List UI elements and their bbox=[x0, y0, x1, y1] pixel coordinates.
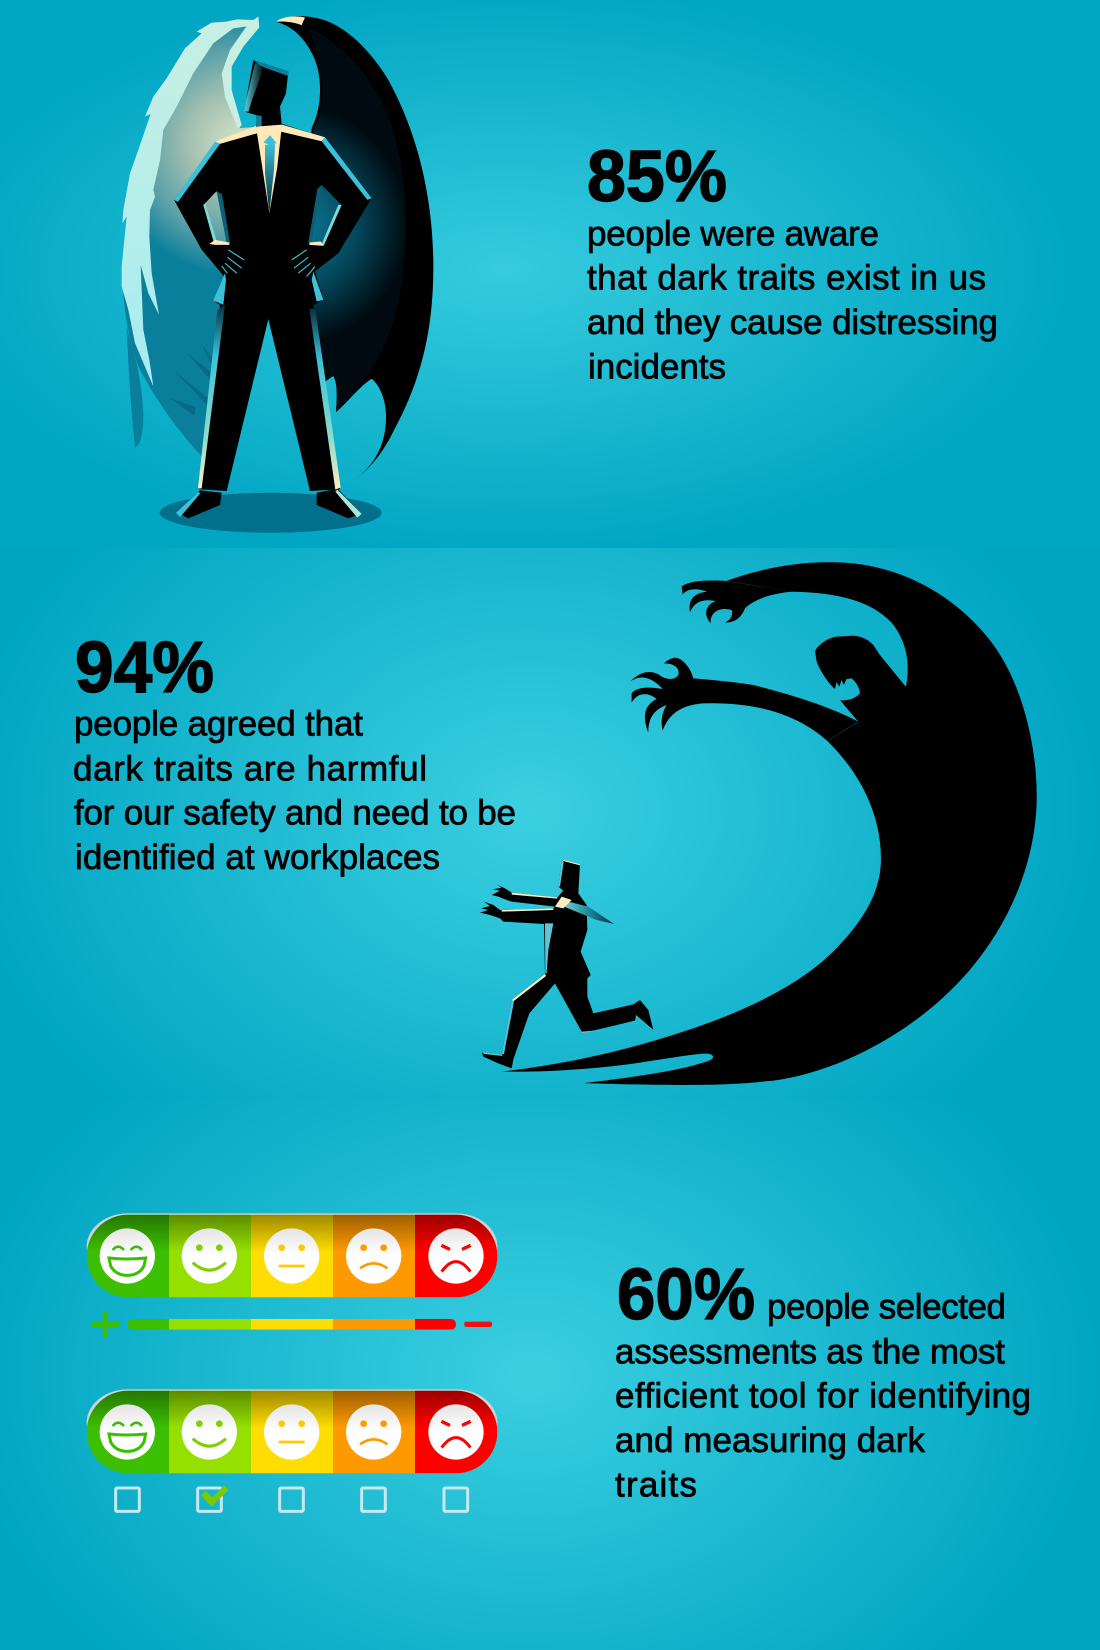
illustration: businessman with angel and devil wings bbox=[122, 16, 433, 533]
stat text: 85% bbox=[587, 137, 998, 386]
background: middle section bbox=[0, 548, 1100, 1100]
description: dark traits are harmful bbox=[73, 750, 427, 788]
checkboxes bbox=[116, 1488, 468, 1511]
description: identified at workplaces bbox=[75, 838, 440, 877]
description bbox=[587, 214, 998, 386]
number 94%: 94% bbox=[75, 628, 214, 708]
description: people agreed that bbox=[74, 704, 363, 744]
sad face bbox=[346, 1404, 401, 1460]
running man bbox=[480, 859, 653, 1068]
neutral face bbox=[264, 1228, 319, 1284]
description: efficient tool for identifying bbox=[615, 1376, 1031, 1416]
ground shadow bbox=[160, 493, 382, 533]
description: that dark traits exist in us bbox=[587, 258, 986, 298]
background: top section bbox=[0, 0, 1100, 548]
emoji rating scales bbox=[87, 1213, 497, 1511]
description: and they cause distressing bbox=[587, 303, 998, 342]
rating pill with checkboxes bbox=[87, 1389, 497, 1511]
man silhouette bbox=[174, 60, 372, 491]
description: for our safety and need to be bbox=[74, 794, 516, 832]
background: bottom section bbox=[0, 1100, 1100, 1650]
description bbox=[73, 704, 516, 877]
rating pill with scale bar bbox=[87, 1213, 497, 1338]
angry face bbox=[428, 1404, 484, 1460]
sad face bbox=[346, 1228, 401, 1284]
description: assessments as the most bbox=[615, 1332, 1005, 1372]
number 60%: 60% bbox=[617, 1255, 755, 1335]
illustration: shadow monster chasing running man bbox=[480, 562, 1037, 1085]
monster shadow bbox=[502, 562, 1037, 1085]
happy face bbox=[182, 1228, 237, 1284]
very happy face bbox=[100, 1228, 155, 1284]
happy face bbox=[182, 1404, 237, 1460]
right shoe bbox=[317, 489, 362, 518]
plus sign bbox=[92, 1311, 120, 1338]
left shoe bbox=[177, 490, 222, 518]
description: traits bbox=[615, 1466, 697, 1504]
devil wing bbox=[276, 16, 433, 479]
very happy face bbox=[100, 1404, 155, 1460]
gradient scale bar bbox=[128, 1319, 456, 1330]
description: people selected bbox=[767, 1288, 1006, 1326]
angry face bbox=[428, 1228, 484, 1284]
angel wing bbox=[122, 17, 260, 458]
suit highlights bbox=[174, 60, 372, 518]
description: people were aware bbox=[587, 214, 879, 254]
number 85%: 85% bbox=[587, 137, 727, 217]
stat text: 94% bbox=[73, 628, 516, 877]
description: incidents bbox=[588, 348, 726, 386]
stat text: 60% bbox=[615, 1255, 1031, 1504]
minus sign bbox=[464, 1322, 492, 1327]
check mark bbox=[201, 1485, 228, 1507]
description bbox=[615, 1288, 1031, 1504]
description: and measuring dark bbox=[615, 1421, 926, 1460]
neutral face bbox=[264, 1404, 319, 1460]
